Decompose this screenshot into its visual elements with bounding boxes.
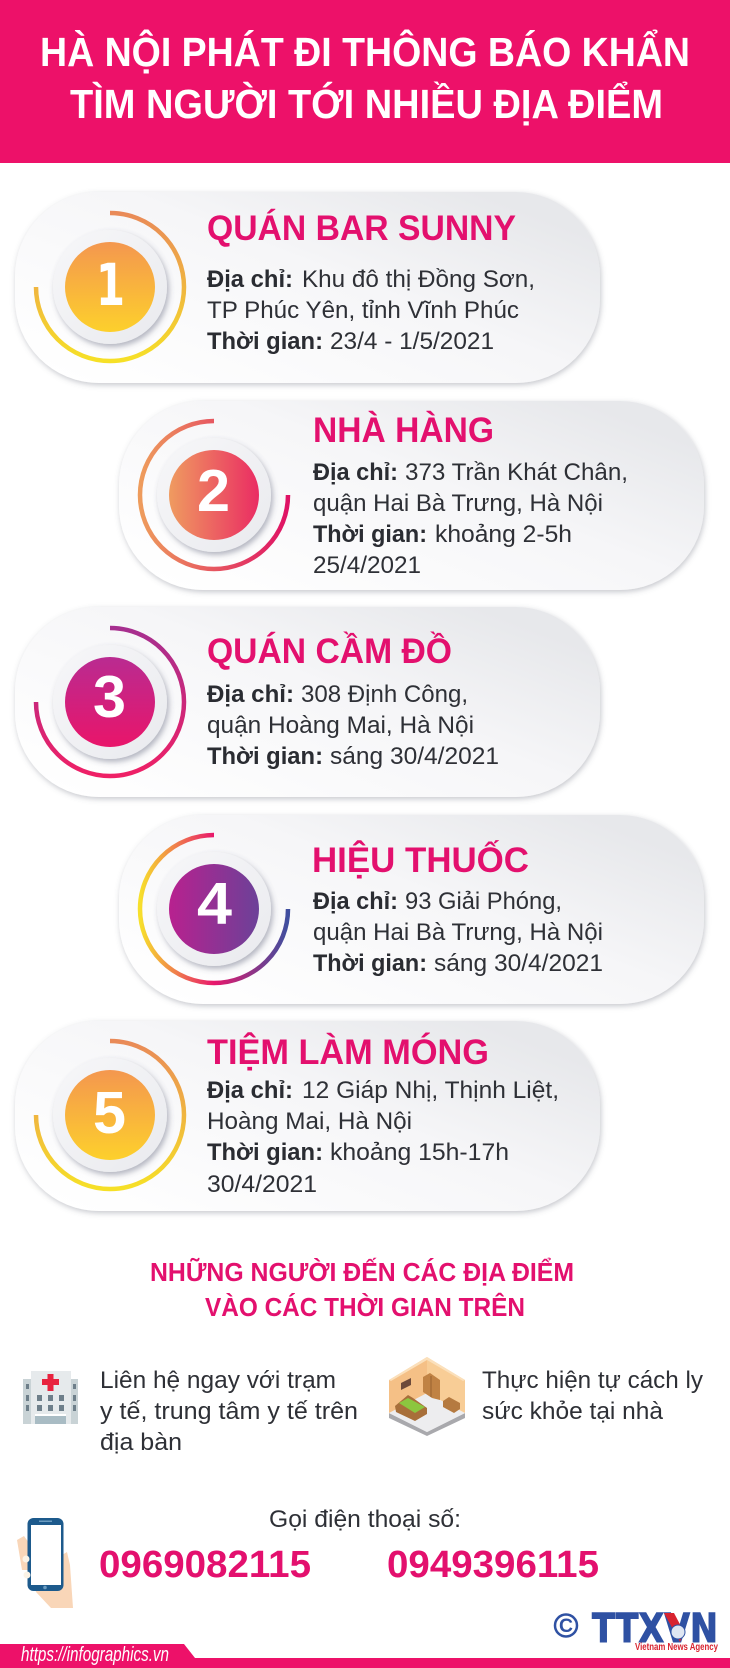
heading: Quán bar Sunny: QUÁN BAR SUNNY: [207, 208, 516, 248]
address and time text: TP Phúc Yên, tỉnh Vĩnh Phúc: [207, 297, 519, 324]
number badge 2: [140, 421, 288, 569]
address and time text: sáng 30/4/2021: [434, 950, 603, 977]
address and time text: Thời gian:: [207, 1139, 323, 1166]
title: HÀ NỘI PHÁT ĐI THÔNG BÁO KHẨN: [40, 28, 690, 75]
panel: location 4, pharmacy: [119, 815, 704, 1004]
panel: location 3, pawn shop: [15, 607, 600, 797]
text: contact health station: Liên hệ ngay với trạm: [100, 1367, 336, 1394]
text: contact health station: [100, 1367, 358, 1456]
footer bar: [0, 1644, 730, 1668]
text: self isolate at home: [482, 1367, 704, 1425]
address and time text: khoảng 2-5h: [435, 521, 572, 548]
icon: hospital: [23, 1371, 78, 1424]
panel: location 1, Sunny bar: [15, 192, 600, 383]
text: self isolate at home: sức khỏe tại nhà: [482, 1398, 663, 1425]
number badge 1: [36, 213, 184, 361]
phone number 2: 0949396115: [387, 1544, 599, 1586]
heading: Hiệu thuốc: HIỆU THUỐC: [312, 840, 529, 880]
panel: location 2, restaurant: [119, 401, 704, 590]
title: TÌM NGƯỜI TỚI NHIỀU ĐỊA ĐIỂM: [70, 80, 663, 127]
address and time text: Địa chỉ:: [313, 888, 398, 915]
text: contact health station: địa bàn: [100, 1429, 182, 1456]
address and time text: quận Hoàng Mai, Hà Nội: [207, 712, 474, 739]
section heading: VÀO CÁC THỜI GIAN TRÊN: [205, 1292, 525, 1322]
number badge 3: 3: [93, 664, 126, 730]
address and time text: [313, 459, 628, 579]
number badge 4: 4: [197, 871, 232, 937]
address and time text: Địa chỉ:: [313, 459, 398, 486]
number badge 5: [36, 1041, 184, 1189]
logo: TTXVN: C: [559, 1616, 573, 1637]
text: call label: Gọi điện thoại số:: [269, 1506, 461, 1533]
address and time text: 30/4/2021: [207, 1171, 317, 1198]
panel: location 5, nail salon: [15, 1021, 600, 1211]
address and time text: sáng 30/4/2021: [330, 743, 499, 770]
address and time text: Khu đô thị Đồng Sơn,: [302, 266, 535, 293]
section heading: [150, 1257, 574, 1322]
address and time text: Thời gian:: [313, 521, 427, 548]
phone number 1: 0969082115: [99, 1544, 311, 1586]
address and time text: 12 Giáp Nhị, Thịnh Liệt,: [302, 1077, 559, 1104]
address and time text: Thời gian:: [207, 743, 323, 770]
number badge 5: 5: [93, 1080, 126, 1146]
header banner: [0, 0, 730, 163]
text: contact health station: y tế, trung tâm y tế trên: [100, 1398, 358, 1425]
number badge 4: [140, 835, 288, 983]
address and time text: 308 Định Công,: [301, 681, 468, 708]
address and time text: Thời gian:: [207, 328, 323, 355]
address and time text: [207, 1077, 559, 1198]
address and time text: Địa chỉ:: [207, 266, 293, 293]
number badge 1: 1: [96, 251, 125, 319]
address and time text: Hoàng Mai, Hà Nội: [207, 1108, 412, 1135]
number badge 3: [36, 628, 184, 776]
title: [40, 28, 690, 127]
website url: https://infographics.vn: [21, 1644, 169, 1666]
icon: hand holding phone: [17, 1518, 73, 1608]
address and time text: quận Hai Bà Trưng, Hà Nội: [313, 919, 603, 946]
address and time text: 93 Giải Phóng,: [405, 888, 562, 915]
heading: Quán cầm đồ: QUÁN CẦM ĐỒ: [207, 631, 452, 671]
heading: Nhà hàng: NHÀ HÀNG: [313, 410, 494, 450]
address and time text: 23/4 - 1/5/2021: [330, 328, 494, 355]
address and time text: [207, 681, 499, 770]
address and time text: khoảng 15h-17h: [330, 1139, 509, 1166]
address and time text: 373 Trần Khát Chân,: [405, 459, 628, 486]
section heading: NHỮNG NGƯỜI ĐẾN CÁC ĐỊA ĐIỂM: [150, 1257, 574, 1287]
icon: isolation room: [389, 1357, 465, 1436]
address and time text: Địa chỉ:: [207, 681, 294, 708]
address and time text: 25/4/2021: [313, 552, 421, 579]
heading: Tiệm làm móng: TIỆM LÀM MÓNG: [207, 1032, 489, 1072]
address and time text: Địa chỉ:: [207, 1077, 293, 1104]
address and time text: [313, 888, 603, 977]
address and time text: quận Hai Bà Trưng, Hà Nội: [313, 490, 603, 517]
number badge 2: 2: [197, 458, 230, 524]
address and time text: Thời gian:: [313, 950, 427, 977]
text: self isolate at home: Thực hiện tự cách ly: [482, 1367, 704, 1394]
address and time text: [207, 266, 535, 355]
